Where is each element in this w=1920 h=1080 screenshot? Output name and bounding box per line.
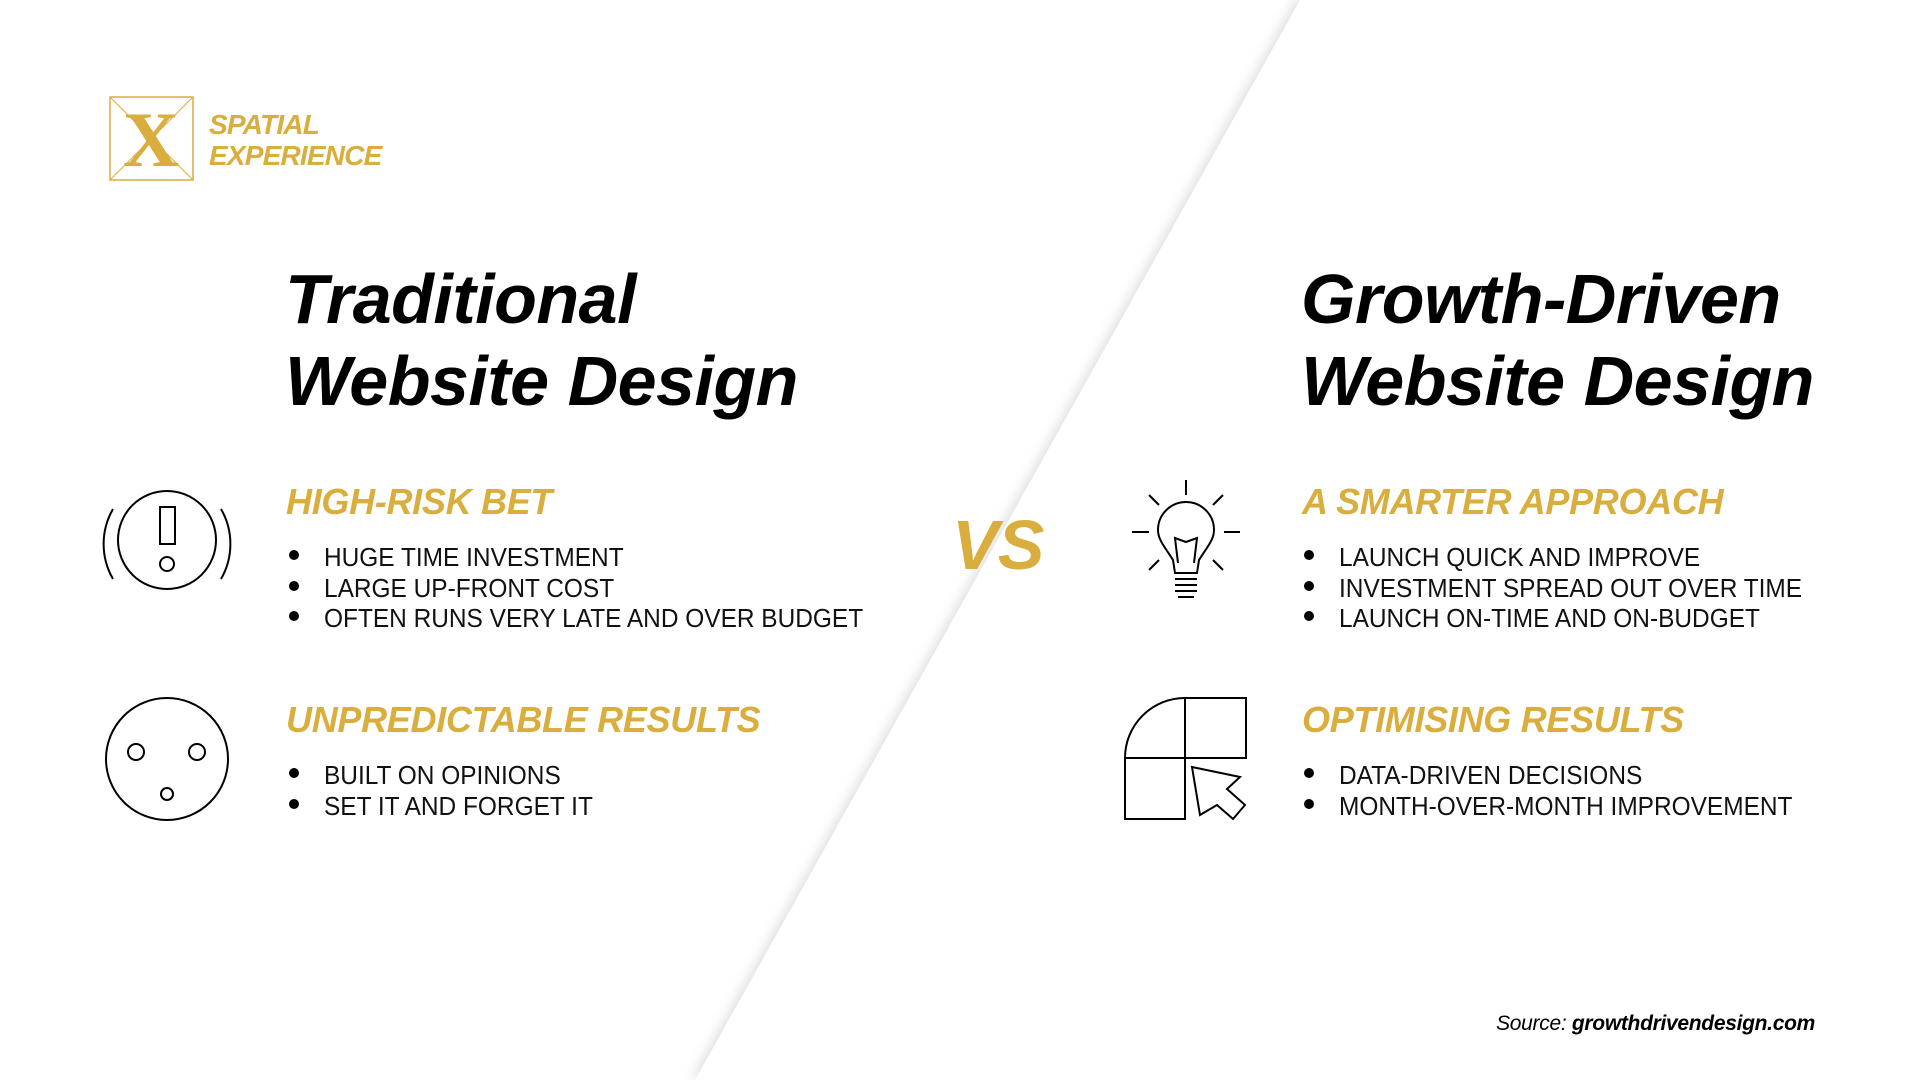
icon: outlet bbox=[105, 697, 229, 821]
vs: VS bbox=[952, 506, 1043, 584]
bullets: unpredictable: BUILT ON OPINIONS bbox=[324, 760, 561, 790]
heading: smarter approach: A SMARTER APPROACH bbox=[1302, 481, 1723, 522]
logo mark bbox=[109, 96, 194, 182]
bullets: smarter: INVESTMENT SPREAD OUT OVER TIME bbox=[1339, 573, 1802, 603]
heading: unpredictable: UNPREDICTABLE RESULTS bbox=[286, 699, 760, 740]
icon: alert bbox=[102, 490, 232, 590]
bullets: smarter: LAUNCH ON-TIME AND ON-BUDGET bbox=[1339, 603, 1760, 633]
title: traditional bbox=[285, 260, 798, 420]
bullets: smarter bbox=[1304, 542, 1802, 633]
heading: optimising: OPTIMISING RESULTS bbox=[1302, 699, 1684, 740]
title: growth-driven: Growth-Driven bbox=[1301, 260, 1781, 338]
title: growth-driven bbox=[1301, 260, 1814, 420]
icon: light bulb bbox=[1132, 480, 1240, 598]
logo bbox=[109, 96, 383, 182]
bullets: high-risk: OFTEN RUNS VERY LATE AND OVER BUDGET bbox=[324, 603, 863, 633]
bullets: optimising: MONTH-OVER-MONTH IMPROVEMENT bbox=[1339, 791, 1792, 821]
bullets: optimising: DATA-DRIVEN DECISIONS bbox=[1339, 760, 1642, 790]
bullets: optimising bbox=[1304, 760, 1792, 821]
title: growth-driven: Website Design bbox=[1301, 342, 1814, 420]
bullets: unpredictable: SET IT AND FORGET IT bbox=[324, 791, 593, 821]
logo mark: X bbox=[123, 96, 179, 182]
logo text: SPATIAL bbox=[209, 109, 319, 140]
bullets: high-risk: HUGE TIME INVESTMENT bbox=[324, 542, 624, 572]
title: traditional: Traditional bbox=[285, 260, 636, 338]
bullets: unpredictable bbox=[289, 760, 593, 821]
bullets: high-risk bbox=[289, 542, 863, 633]
bullets: smarter: LAUNCH QUICK AND IMPROVE bbox=[1339, 542, 1700, 572]
icon: grid cursor bbox=[1124, 697, 1247, 820]
bullets: high-risk: LARGE UP-FRONT COST bbox=[324, 573, 614, 603]
logo text bbox=[209, 109, 383, 171]
logo text: EXPERIENCE bbox=[209, 140, 382, 171]
title: traditional: Website Design bbox=[285, 342, 798, 420]
source: Source: growthdrivendesign.com bbox=[1496, 1012, 1815, 1035]
heading: high-risk bet: HIGH-RISK BET bbox=[286, 481, 552, 522]
